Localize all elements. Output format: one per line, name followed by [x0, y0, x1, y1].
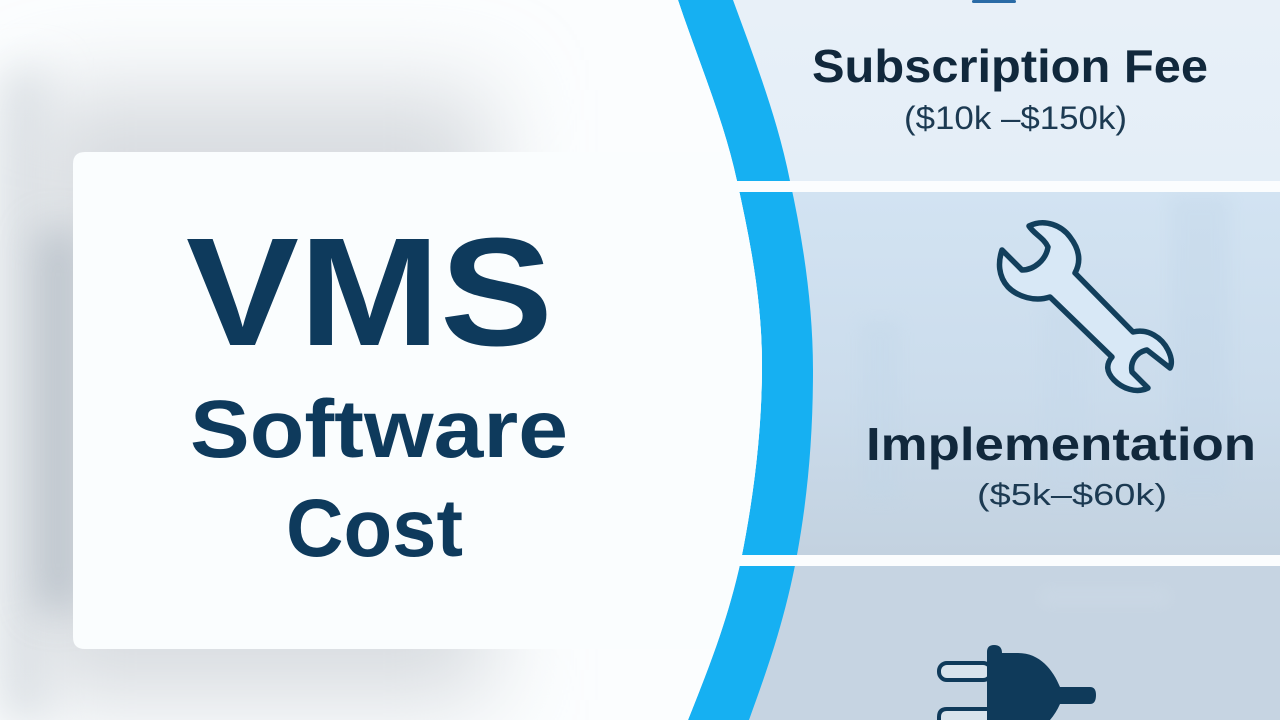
arc breaks at dividers — [730, 181, 810, 566]
blue arc band — [678, 0, 813, 720]
panel: subscription fee background — [725, 0, 1280, 181]
title — [186, 206, 568, 574]
icon: wrench — [1000, 223, 1171, 390]
icon: plug — [939, 645, 1096, 720]
panel: integration background — [700, 566, 1280, 720]
left white circular area — [0, 0, 780, 720]
title: VMS: VMS — [186, 206, 553, 378]
text: subscription range: ($10k –$150k) — [904, 100, 1127, 136]
panel: implementation background — [740, 192, 1280, 555]
text: implementation range: ($5k–$60k) — [977, 477, 1167, 512]
heading: subscription fee: Subscription Fee — [812, 40, 1208, 92]
white dividers between panels — [725, 181, 1280, 566]
title card — [73, 152, 762, 649]
title: Cost: Cost — [286, 483, 463, 574]
heading: implementation: Implementation — [866, 418, 1256, 470]
title: Software: Software — [190, 384, 568, 475]
icon: partial top icon — [972, 0, 1016, 3]
